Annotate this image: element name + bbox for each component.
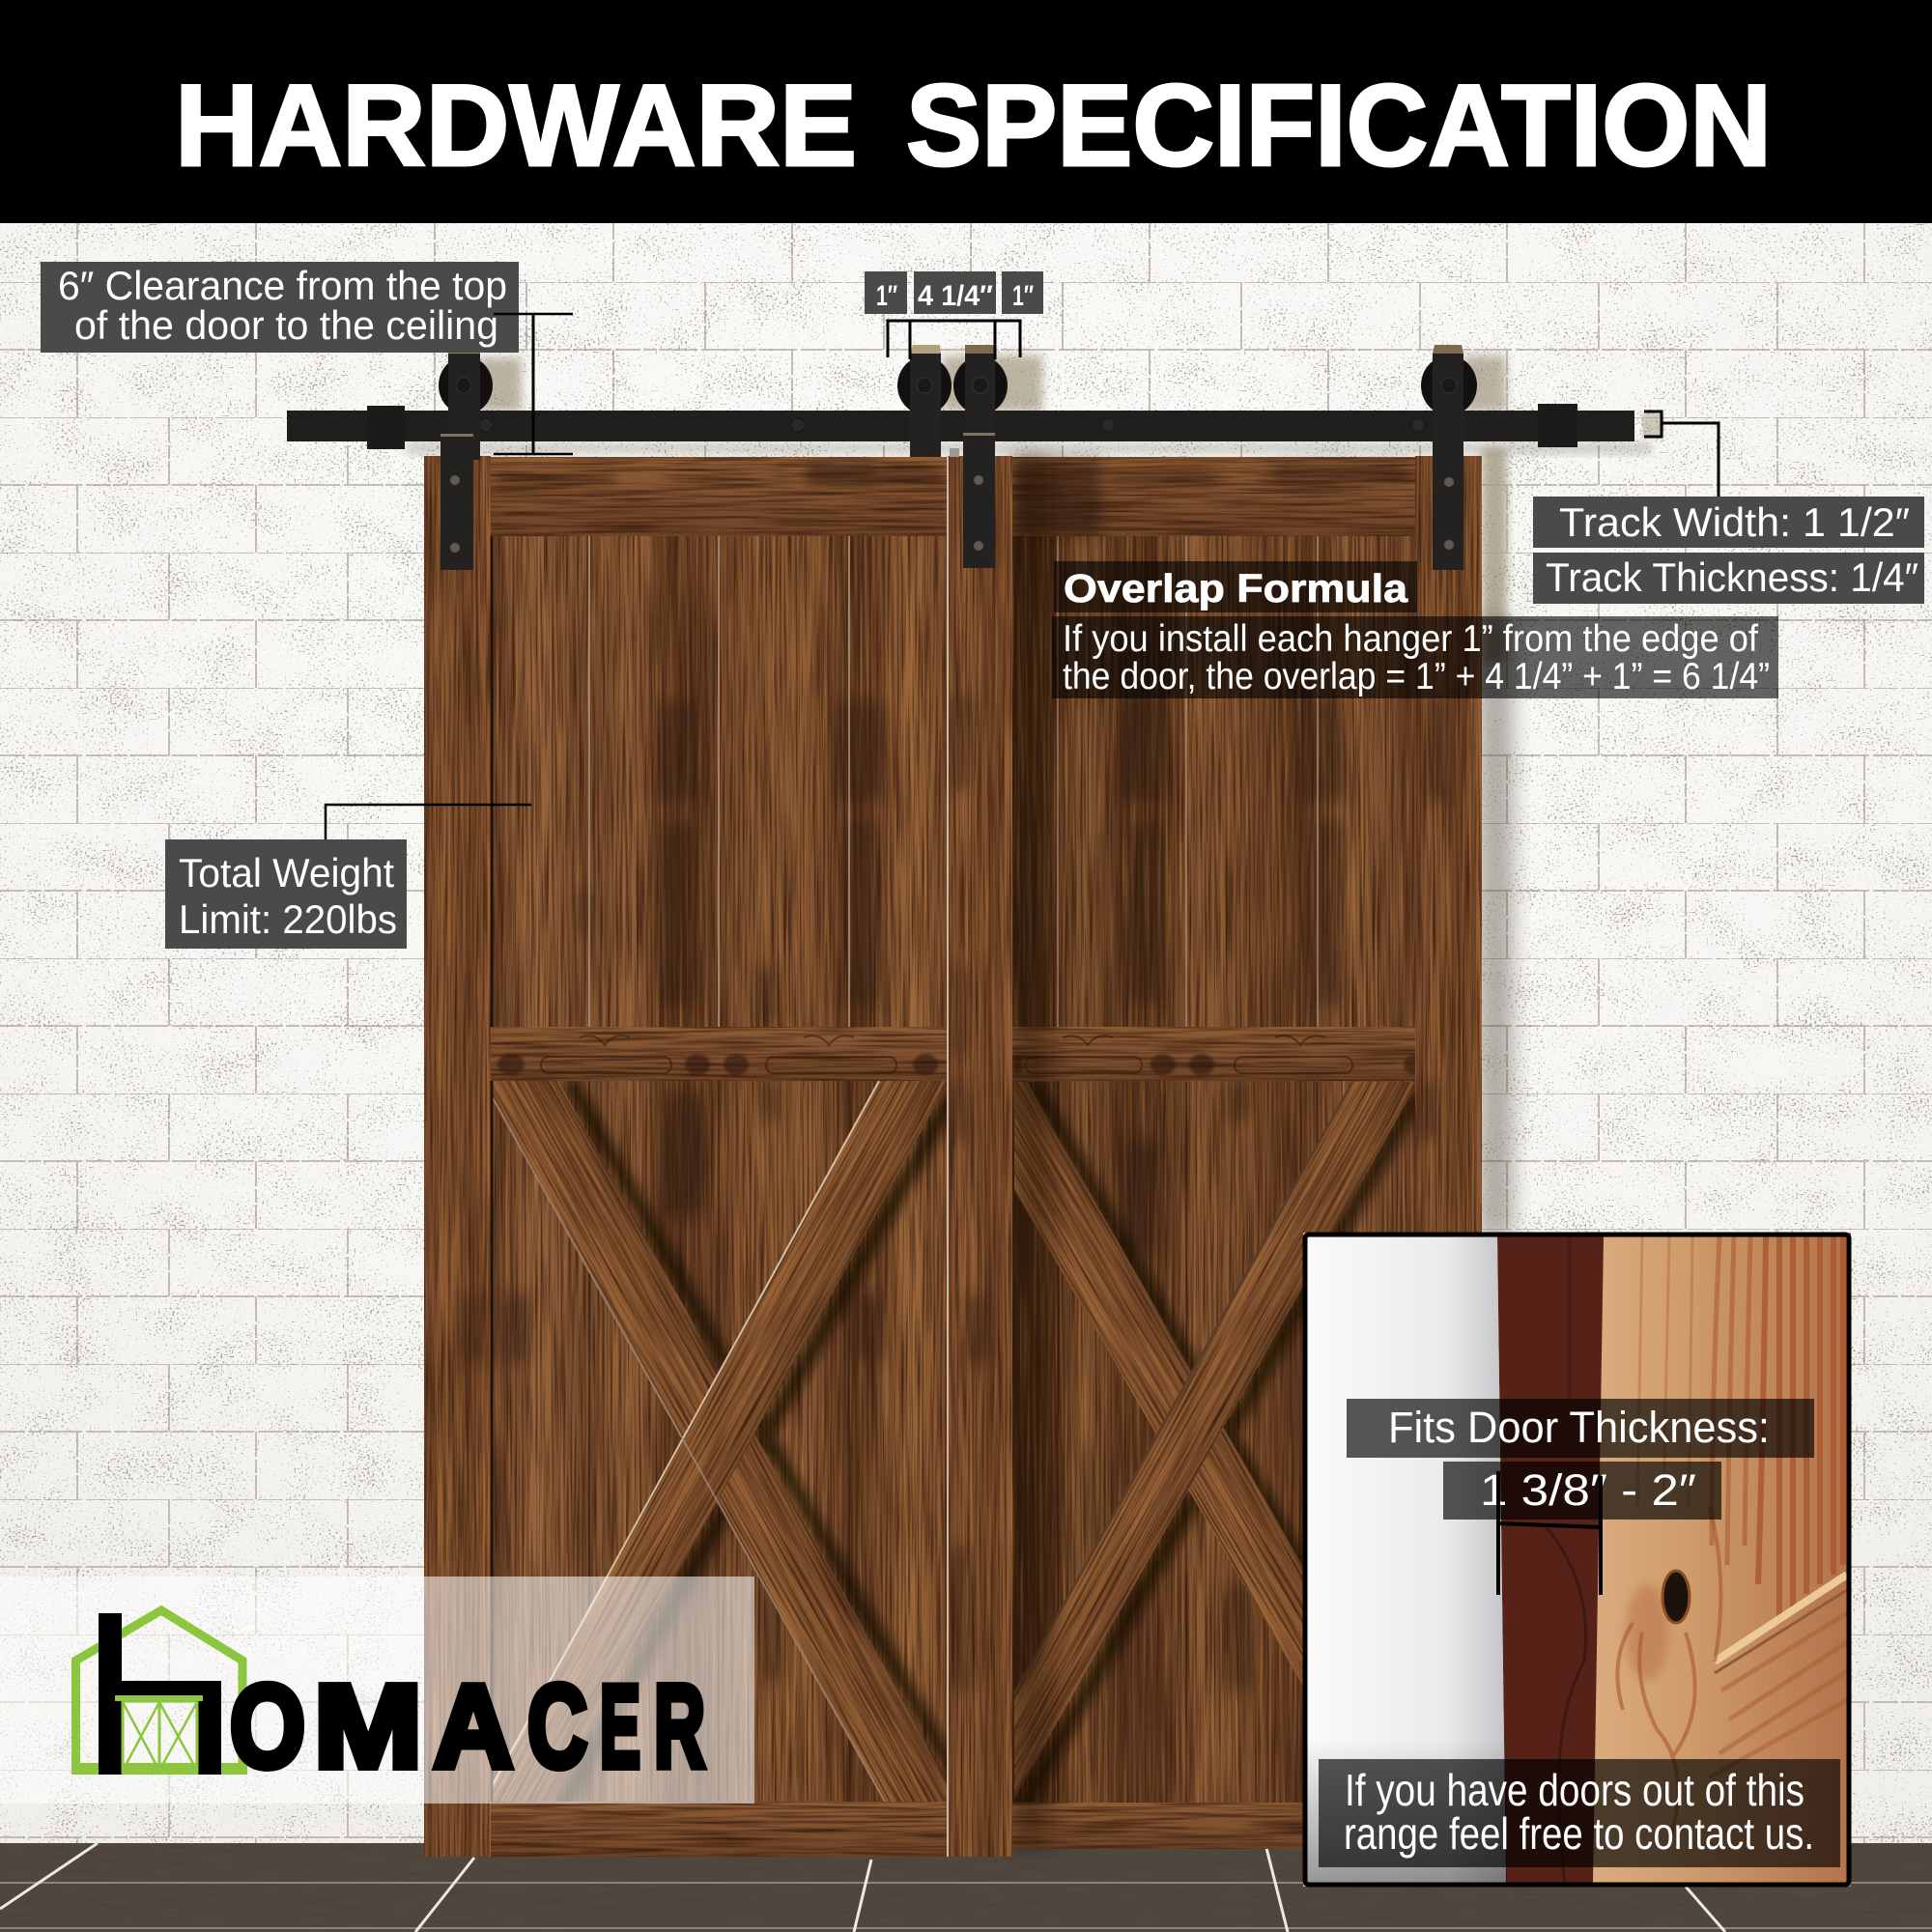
wordmark: O (230, 1661, 305, 1792)
top rail (1012, 457, 1415, 536)
callout: overlap formula: Overlap Formula (1064, 566, 1408, 611)
icon: black H (99, 1613, 221, 1775)
x brace, front board (1014, 1082, 1415, 1799)
right stile (1415, 456, 1482, 1848)
inset dark door edge (1497, 1236, 1604, 1884)
shadow from left door (1012, 456, 1051, 1848)
left barn door (424, 456, 1012, 1907)
inset frame (1305, 1235, 1849, 1885)
mid rail (1012, 1027, 1427, 1081)
callout: overlap formula: the door, the overlap = 1” + 4 1/4” + 1” = 6 1/4” (1063, 656, 1770, 697)
brace shadows (1024, 1082, 1415, 1806)
brace shadows (560, 1081, 956, 1811)
bracket: ceiling clearance (494, 314, 573, 454)
callout: ceiling clearance: 6″ Clearance from the top (58, 263, 507, 308)
centre stile (947, 456, 1012, 1857)
wordmark: A (434, 1661, 513, 1792)
thickness bracket (1498, 1471, 1601, 1595)
labels: hanger spacing: 4 1/4″ (918, 280, 993, 312)
bottom rail (1012, 1803, 1415, 1849)
inset: door thickness close-up: Fits Door Thickness: (1388, 1403, 1770, 1452)
labels: hanger spacing: 1″ (876, 280, 897, 312)
floor tiles (0, 1843, 1932, 1932)
mid rail (491, 1027, 947, 1081)
x brace, back board (493, 1081, 947, 1802)
inset wood face (1303, 1233, 1851, 1887)
thickness label (1347, 1399, 1814, 1458)
logo: Homacer (71, 1610, 705, 1792)
title: HARDWARE (175, 61, 857, 190)
wordmark: E (600, 1661, 640, 1792)
hanger 2 (897, 345, 959, 457)
planks (1012, 483, 1415, 1848)
track bolts (479, 418, 1425, 432)
header band (0, 0, 1932, 223)
wordmark (230, 1661, 705, 1792)
icon: green house (71, 1610, 247, 1775)
callout: ceiling clearance (41, 262, 519, 353)
contact note (1319, 1759, 1840, 1867)
wordmark: M (314, 1661, 422, 1792)
callout: track dimensions (1533, 497, 1924, 604)
title: SPECIFICATION (906, 61, 1772, 190)
barn door track (287, 404, 1634, 449)
hanger 1 (439, 345, 493, 570)
logo backdrop (0, 1577, 754, 1804)
bottom rail (491, 1802, 947, 1857)
title (175, 61, 1772, 190)
knot (1662, 1571, 1690, 1623)
bracket: track thickness leader (1644, 412, 1719, 497)
inset wood stripes (1617, 1236, 1847, 1835)
labels: hanger spacing (865, 271, 1043, 314)
callout: total weight limit: Limit: 220lbs (179, 896, 397, 942)
right barn door (1003, 442, 1482, 1853)
wall shadows behind hardware and doors (479, 355, 1663, 662)
hanger 3 (953, 345, 1008, 568)
track connectors (367, 406, 405, 449)
callout: ceiling clearance: of the door to the ceiling (74, 302, 498, 348)
inset: door thickness close-up (1303, 1233, 1851, 1887)
bracket: hanger spacing (888, 321, 1020, 359)
wordmark: C (527, 1661, 587, 1792)
inset wall (1307, 1236, 1506, 1884)
callout: total weight limit: Total Weight (179, 850, 394, 895)
callout: track dimensions: Track Width: 1 1/2″ (1559, 499, 1910, 545)
inset: door thickness close-up: If you have doors out of this (1345, 1765, 1804, 1815)
top rail (491, 457, 947, 536)
x brace, back board (1014, 1082, 1302, 1686)
callout: overlap formula (1052, 561, 1778, 698)
x brace, front board (493, 1081, 947, 1802)
labels: hanger spacing: 1″ (1012, 280, 1034, 312)
wordmark: R (654, 1661, 705, 1792)
inset: door thickness close-up: 1 3/8″ - 2″ (1480, 1465, 1696, 1515)
icon: green barn doors (115, 1695, 203, 1773)
callout: overlap formula: If you install each hanger 1” from the edge of (1063, 618, 1758, 660)
left stile (424, 456, 491, 1857)
callout: total weight limit (165, 805, 531, 949)
planks (491, 536, 947, 1802)
hanger 4 (1421, 345, 1477, 570)
callout: track dimensions: Track Thickness: 1/4″ (1546, 554, 1918, 600)
inset: door thickness close-up: range feel free to contact us. (1344, 1808, 1814, 1859)
